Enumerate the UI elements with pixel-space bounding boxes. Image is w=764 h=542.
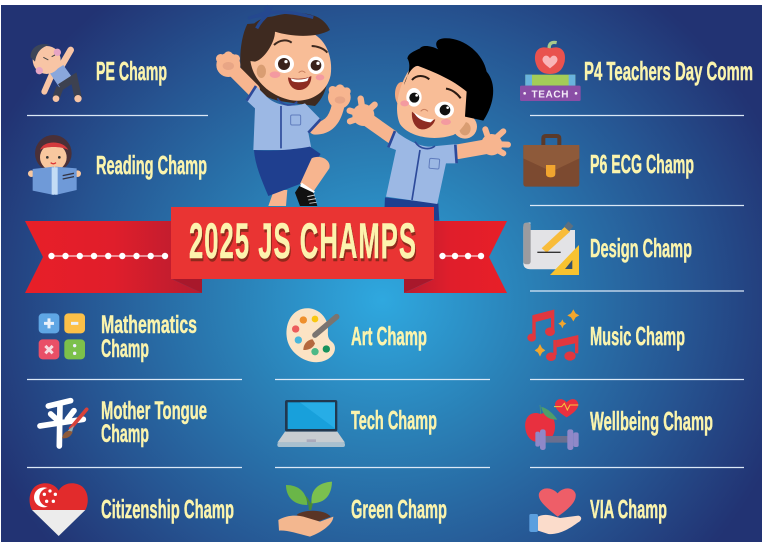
icon: heart in hand [529,488,581,534]
icon: briefcase [523,136,579,187]
title [189,213,418,272]
dotted line right [439,253,484,259]
label: PE Champ: PE Champ [96,56,167,86]
label: Art Champ: Art Champ [351,321,427,351]
icon: Singapore flag heart [30,483,88,536]
label: Mother Tongue Champ [101,397,207,448]
label: Mathematics Champ: Champ [101,335,149,363]
icon: laptop [277,400,345,447]
divider lines [27,116,744,468]
right ribbon tail [404,221,507,293]
left ribbon tail [25,221,202,293]
icon: wellbeing apple, heart, dumbbell [525,399,579,450]
label: Citizenship Champ: Citizenship Champ [101,494,234,524]
illustration: girl in uniform [216,6,351,206]
label: Green Champ: Green Champ [351,494,447,524]
label: Mathematics Champ: Mathematics [101,311,197,339]
icon: design blueprint [523,221,579,275]
banner: ribbon [25,207,507,293]
icon: apple on books TEACH: TEACH [531,89,569,100]
label: Music Champ: Music Champ [590,321,685,351]
dotted line left [48,253,168,259]
title: 2025 JS CHAMPS [190,216,418,272]
icon: maths operators [39,313,85,359]
icon: art palette [286,308,337,362]
label: Mother Tongue Champ: Mother Tongue [101,397,207,425]
illustration: boy in uniform [350,38,508,221]
label: Tech Champ: Tech Champ [351,405,437,435]
icon: apple on books TEACH [520,42,581,101]
label: Mathematics Champ [101,311,197,363]
label: Mother Tongue Champ: Champ [101,420,149,448]
icon: PE stretching child [31,44,82,102]
label: VIA Champ: VIA Champ [590,494,667,524]
icon: plant in hand [278,482,333,537]
icon: chinese character and brush [40,401,87,446]
banner centre [171,207,434,279]
title: 2025 JS CHAMPS [189,213,417,269]
icon: music notes [527,309,579,361]
icon: reading child [28,135,81,195]
label: Reading Champ: Reading Champ [96,150,207,180]
